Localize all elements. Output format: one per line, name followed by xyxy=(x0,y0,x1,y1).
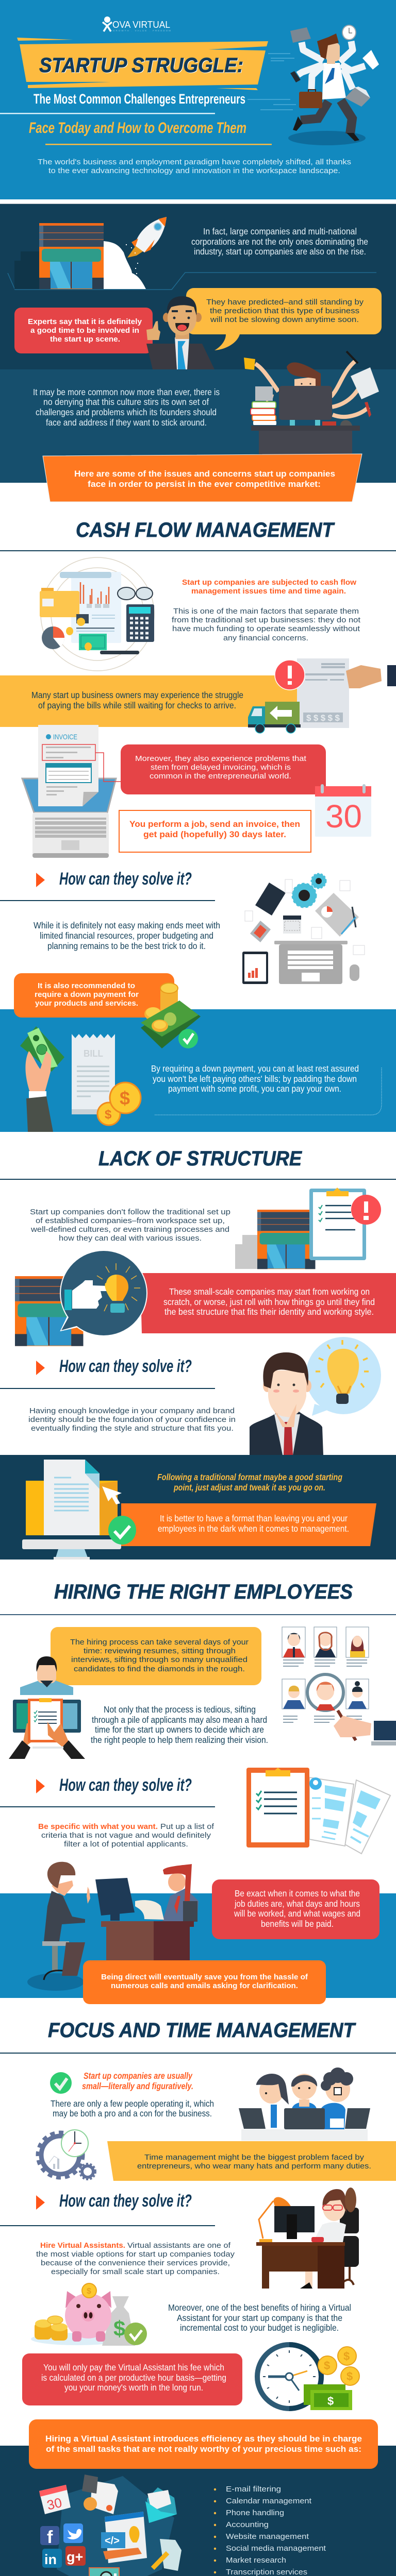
panel: down payment band xyxy=(0,973,396,1132)
callout: be exact: Be exact when it comes to what the xyxy=(235,1888,360,1899)
icon: calendar: 30 xyxy=(45,2495,63,2513)
text: budgeting xyxy=(34,920,220,951)
callout: experts xyxy=(14,308,153,353)
callout: efficiency: Hiring a Virtual Assistant introduces efficiency as they should be in charge xyxy=(45,2434,362,2444)
illustration: piggy bank and savings xyxy=(31,2283,147,2346)
text: hire virtual assistants: the most viable options for start up companies today xyxy=(36,2250,235,2259)
illustration: shop with idea bubble xyxy=(15,1250,147,1346)
panel: small-scale band xyxy=(140,1273,396,1333)
illustration: monitor with document xyxy=(22,1460,136,1560)
illustration: bill and coins: $ xyxy=(120,1088,130,1109)
panel: small-scale band: These small-scale companies may start from working on xyxy=(169,1286,370,1297)
text: tweak it xyxy=(157,1472,342,1493)
icon: social media xyxy=(40,2523,86,2568)
illustration: bill and coins xyxy=(72,1034,141,1125)
illustration: job interview xyxy=(27,1862,199,1991)
text: padding the down payment: you won't be left paying others' bills; by padding the down xyxy=(153,1074,357,1084)
subtitle: The Most Common Challenges Entrepreneurs xyxy=(34,91,245,107)
text: traditional set up: well-defined cultures, or even training processes and xyxy=(30,1225,229,1234)
text: tedious process: Not only that the process is tedious, sifting xyxy=(104,1704,256,1715)
illustration: shop and rocket xyxy=(14,217,167,289)
text: brand identity: Having enough knowledge in your company and brand xyxy=(29,1406,235,1415)
callout: issues banner: face in order to persist in the ever competitive market: xyxy=(88,480,321,489)
text: own challenges: no denying that this culture stirs its own set of xyxy=(43,397,209,407)
callout: per productive hour: you your money's worth in the long run. xyxy=(64,2382,203,2393)
illustration: multitasking businessman xyxy=(248,25,379,145)
text: small companies: There are only a few people operating it, which xyxy=(51,2098,214,2109)
callout: hiring process: time: reviewing resumes, sitting through xyxy=(84,1647,236,1655)
callout: be exact: will be worked, and what wages and xyxy=(234,1908,360,1919)
intro text xyxy=(38,158,351,175)
icon: pen tool xyxy=(153,2539,182,2571)
panel: format band xyxy=(0,1455,396,1560)
panel: bills band: Many start up business owners may experience the struggle xyxy=(31,690,243,700)
illustration: clock and money: $ xyxy=(324,2359,330,2372)
text: small companies: may be both a pro and a con for the business. xyxy=(53,2108,212,2119)
text: negligible cost: incremental cost to your budget is negligible. xyxy=(180,2323,339,2333)
icon: green check xyxy=(50,2072,72,2094)
illustration: clock and money: $ xyxy=(346,2370,353,2383)
text: be specific: filter a lot of potential applicants. xyxy=(64,1840,188,1849)
text: small companies: Start up companies are usually xyxy=(84,2071,193,2081)
logo: OVA Virtual: OVA VIRTUAL xyxy=(112,20,170,30)
panel: small tasks xyxy=(0,2419,396,2576)
icon: social media: g+ xyxy=(67,2549,83,2565)
text: tweak it: point, just adjust and tweak it as you go on. xyxy=(173,1482,325,1493)
heading: lack of structure: LACK OF STRUCTURE xyxy=(98,1147,302,1170)
text: cash flow intro: any financial concerns. xyxy=(223,634,308,642)
heading: focus and time management: FOCUS AND TIME MANAGEMENT xyxy=(48,2019,356,2042)
text: hire virtual assistants xyxy=(36,2241,235,2276)
callout: delayed invoicing: common in the entrepreneurial world. xyxy=(150,772,291,781)
callout: invoice timeline: You perform a job, send an invoice, then xyxy=(129,819,300,829)
icon: social media: in xyxy=(44,2552,57,2567)
callout: be exact: job duties are, what days and hours xyxy=(234,1899,360,1909)
icon: calendar xyxy=(39,2485,71,2514)
callout: delayed invoicing xyxy=(121,744,326,794)
callout: per productive hour: You will only pay the Virtual Assistant his fee which xyxy=(43,2362,224,2372)
callout: down payment: require a down payment for xyxy=(35,990,139,999)
text: small companies: small—literally and figuratively. xyxy=(82,2081,193,2091)
panel: bills band xyxy=(0,675,297,727)
illustration: clock and money xyxy=(257,2345,359,2410)
panel: time management band: Time management might be the biggest problem faced by xyxy=(144,2153,365,2162)
callout: down payment xyxy=(14,973,174,1018)
list: tasks: Calendar management xyxy=(226,2497,312,2505)
icon: analytics xyxy=(89,2568,122,2576)
heading: how can they solve it 1 xyxy=(0,869,215,901)
panel: small-scale band: scratch, or worse, just roll with how things go until they find xyxy=(163,1297,375,1307)
heading: how can they solve it 2 xyxy=(0,1357,215,1389)
panel: startup rise xyxy=(0,204,396,483)
callout: invoice timeline: get paid (hopefully) 30 days later. xyxy=(143,829,286,839)
illustration: recruiter reviewing checklist xyxy=(9,1656,85,1759)
panel: white background for cash flow section xyxy=(0,483,396,1009)
heading: hiring the right employees: HIRING THE RIGHT EMPLOYEES xyxy=(54,1581,353,1603)
logo: OVA Virtual xyxy=(103,16,171,32)
illustration: overdue bill and truck xyxy=(248,658,396,733)
text: own challenges: face and address if they want to stick around. xyxy=(46,417,207,428)
callout: prediction: the prediction that this type of business xyxy=(210,307,359,315)
intro text: The world's business and employment paradigm have completely shifted, all thanks xyxy=(38,158,351,166)
text: own challenges: challenges and problems which its founders should xyxy=(36,407,217,417)
text: cash flow intro: have much funding to operate seamlessly without xyxy=(172,624,360,633)
heading: cash flow management: CASH FLOW MANAGEMENT xyxy=(76,519,335,541)
illustration: invoice on laptop xyxy=(22,725,121,858)
subtitle: Face Today and How to Overcome Them xyxy=(29,120,246,137)
callout: hiring process: candidates to find the diamonds in the rough. xyxy=(74,1665,245,1673)
text: negligible cost: Moreover, one of the best benefits of hiring a Virtual xyxy=(168,2302,351,2313)
illustration: presenter xyxy=(146,296,214,369)
illustration: virtual assistant at desk xyxy=(256,2188,359,2289)
text: padding the down payment xyxy=(151,1063,382,1115)
callout: better to have a format: employees in the dark when it comes to management. xyxy=(158,1523,349,1534)
callout: hiring process: interviews, sifting through so many unqualified xyxy=(71,1655,248,1664)
callout: better to have a format: It is better to have a format than leaving you and your xyxy=(160,1513,348,1523)
list: tasks: Website management xyxy=(226,2532,309,2541)
callout: experts: Experts say that it is definitely xyxy=(28,317,142,326)
icon: calendar 30 xyxy=(315,784,371,837)
list: tasks: Phone handling xyxy=(226,2509,284,2517)
callout: being direct: numerous calls and emails asking for clarification. xyxy=(111,1981,298,1990)
callout: per productive hour xyxy=(22,2353,242,2405)
callout: issues banner: Here are some of the issues and concerns start up companies xyxy=(74,469,335,479)
callout: being direct xyxy=(83,1960,326,2004)
callout: down payment: your products and services. xyxy=(35,999,138,1008)
callout: hiring process xyxy=(51,1627,261,1685)
text: be specific xyxy=(38,1822,214,1849)
callout: invoice timeline xyxy=(119,810,311,852)
list: tasks: E-mail filtering xyxy=(226,2485,281,2494)
text: hire virtual assistants: especially for small scale start up companies. xyxy=(51,2267,220,2276)
callout: issues banner xyxy=(43,454,362,502)
text: budgeting: limited financial resources, proper budgeting and xyxy=(40,930,213,941)
callout: being direct: Being direct will eventually save you from the hassle of xyxy=(101,1973,308,1981)
callout: prediction: They have predicted–and still standing by xyxy=(206,298,364,307)
panel: header xyxy=(0,0,396,199)
callout: delayed invoicing: stem from delayed invoicing, which is xyxy=(151,763,291,772)
text: tedious process: through a pile of applicants may also mean a hard xyxy=(92,1715,267,1725)
illustration: candidate profiles and magnifier xyxy=(282,1627,396,1745)
text: budgeting: While it is definitely not easy making ends meet with xyxy=(34,920,220,930)
text: padding the down payment: payment with some profit, you can pay your own. xyxy=(168,1083,341,1094)
callout: down payment: It is also recommended to xyxy=(38,981,135,990)
callout: per productive hour: is calculated on a per productive hour basis—getting xyxy=(41,2372,226,2383)
title banner: STARTUP STRUGGLE: xyxy=(39,54,243,77)
illustration: piggy bank and savings: $ xyxy=(87,2287,91,2296)
title banner xyxy=(17,38,268,90)
text: large companies: In fact, large companies and multi-national xyxy=(203,226,357,236)
illustration: money pile xyxy=(141,983,201,1048)
panel: time management band: entrepreneurs, who wear many hats and perform many duties. xyxy=(137,2162,371,2171)
subtitle xyxy=(0,91,272,145)
illustration: gears and clock xyxy=(38,2130,95,2179)
panel: interview band xyxy=(0,1862,396,2004)
text: traditional set up xyxy=(30,1208,230,1243)
icon: social media: f xyxy=(47,2528,53,2547)
callout: efficiency: of the small tasks that are not really worthy of your precious time such as: xyxy=(46,2444,361,2454)
text: cash flow intro: from the traditional set up businesses: they do not xyxy=(172,616,361,624)
logo: OVA Virtual: GROWTH . VALUE . FREEDOM xyxy=(113,29,171,32)
heading: how can they solve it 4 xyxy=(0,2191,215,2226)
text: be specific: Be specific with what you want. xyxy=(38,1822,158,1831)
list: tasks: Market research xyxy=(226,2556,286,2565)
heading: how can they solve it 1: How can they solve it? xyxy=(59,869,192,889)
illustration: invoice on laptop: INVOICE xyxy=(53,733,77,741)
callout: efficiency xyxy=(29,2419,378,2469)
illustration: clock and money: $ xyxy=(327,2395,334,2408)
illustration: bill and coins: $ xyxy=(105,1108,112,1122)
illustration: thinking man xyxy=(250,1337,381,1455)
illustration: planning desk xyxy=(242,874,365,984)
panel: small-scale band: the best structure that fits their identity and working style. xyxy=(164,1307,374,1317)
text: budgeting: planning remains to be the best trick to do it. xyxy=(47,941,206,951)
callout: delayed invoicing: Moreover, they also experience problems that xyxy=(135,754,307,763)
text: tedious process: the right people to help them realizing their vision. xyxy=(91,1735,268,1745)
illustration: bill and coins: BILL xyxy=(84,1048,103,1059)
illustration: hand with cash xyxy=(20,1026,64,1132)
text: hire virtual assistants: because of the convenience their services provide, xyxy=(41,2259,230,2267)
heading: how can they solve it 2: How can they solve it? xyxy=(59,1357,192,1376)
text: padding the down payment: By requiring a down payment, you can at least rest assured xyxy=(151,1063,359,1074)
text: cash flow intro: management issues time and time again. xyxy=(191,587,346,596)
list: tasks: Accounting xyxy=(226,2520,269,2529)
illustration: three team members on laptops xyxy=(239,2067,370,2141)
text: traditional set up: Start up companies don't follow the traditional set up xyxy=(30,1208,230,1216)
outline bracket xyxy=(8,273,376,290)
callout: prediction xyxy=(186,288,382,350)
text: hire virtual assistants: Hire Virtual Assistants. xyxy=(40,2241,125,2250)
text: tweak it: Following a traditional format maybe a good starting xyxy=(157,1472,342,1482)
text: brand identity: eventually finding the style and structure that fits you. xyxy=(31,1424,234,1433)
icon: calculator and report xyxy=(82,2475,118,2514)
heading: how can they solve it 3 xyxy=(0,1775,215,1807)
intro text: to the ever advancing technology and innovation in the workspace landscape. xyxy=(48,166,340,175)
text: brand identity xyxy=(28,1406,236,1433)
callout: prediction: will not be slowing down anytime soon. xyxy=(210,315,359,324)
panel: bills band: of paying the bills while still waiting for checks to arrive. xyxy=(38,700,236,710)
illustration: clock and money: $ xyxy=(343,2350,350,2363)
text: large companies: corporations are not the only ones dominating the xyxy=(191,236,368,247)
text: large companies: industry, start up companies are also on the rise. xyxy=(194,246,366,257)
illustration: task icons xyxy=(39,2475,182,2576)
heading: how can they solve it 3: How can they solve it? xyxy=(59,1775,192,1795)
icon: envelope xyxy=(145,2487,177,2523)
text: small companies xyxy=(51,2071,214,2119)
list: tasks: Social media management xyxy=(226,2544,326,2553)
callout: be exact xyxy=(212,1879,380,1939)
illustration: overdue bill and truck: $$$$$ xyxy=(306,713,340,723)
illustration: piggy bank and savings: $ xyxy=(113,2316,125,2341)
illustration: finance documents xyxy=(40,557,154,671)
callout: better to have a format xyxy=(121,1503,376,1546)
list: tasks xyxy=(214,2485,326,2576)
callout: be exact: benefits will be paid. xyxy=(261,1919,334,1929)
text: cash flow intro: Start up companies are subjected to cash flow xyxy=(182,578,356,587)
icon: web design xyxy=(101,2512,147,2563)
text: negligible cost xyxy=(168,2302,351,2333)
text: tedious process: time for the start up owners to decide which are xyxy=(95,1724,264,1735)
text: cash flow intro: This is one of the main factors that separate them xyxy=(173,607,359,616)
text: be specific: criteria that is not vague and would definitely xyxy=(41,1831,211,1840)
text: cash flow intro xyxy=(172,578,361,642)
text: traditional set up: how they can deal with various issues. xyxy=(59,1234,202,1243)
icon: web design: </> xyxy=(105,2535,120,2547)
callout: experts: a good time to be involved in xyxy=(30,326,139,335)
icon: calendar 30: 30 xyxy=(325,799,362,835)
illustration: busy founder xyxy=(244,351,379,455)
callout: hiring process: The hiring process can take several days of your xyxy=(70,1638,249,1647)
text: negligible cost: Assistant for your start up company is that the xyxy=(177,2313,342,2323)
text: hire virtual assistants: Virtual assistants are one of xyxy=(127,2241,231,2250)
heading: how can they solve it 4: How can they solve it? xyxy=(59,2191,192,2211)
text: tedious process xyxy=(91,1704,268,1745)
text: traditional set up: of established companies–from workspace set up, xyxy=(36,1216,225,1225)
text: own challenges xyxy=(33,387,220,428)
illustration: criteria clipboard and resumes xyxy=(246,1768,390,1854)
panel: time management band xyxy=(107,2141,396,2181)
text: be specific: Put up a list of xyxy=(160,1822,214,1831)
callout: experts: the start up scene. xyxy=(50,335,120,344)
illustration: shop with checklist xyxy=(235,1188,381,1269)
text: brand identity: identity should be the foundation of your confidence in xyxy=(28,1415,236,1424)
text: own challenges: It may be more common now more than ever, there is xyxy=(33,387,220,397)
text: large companies xyxy=(191,226,368,257)
